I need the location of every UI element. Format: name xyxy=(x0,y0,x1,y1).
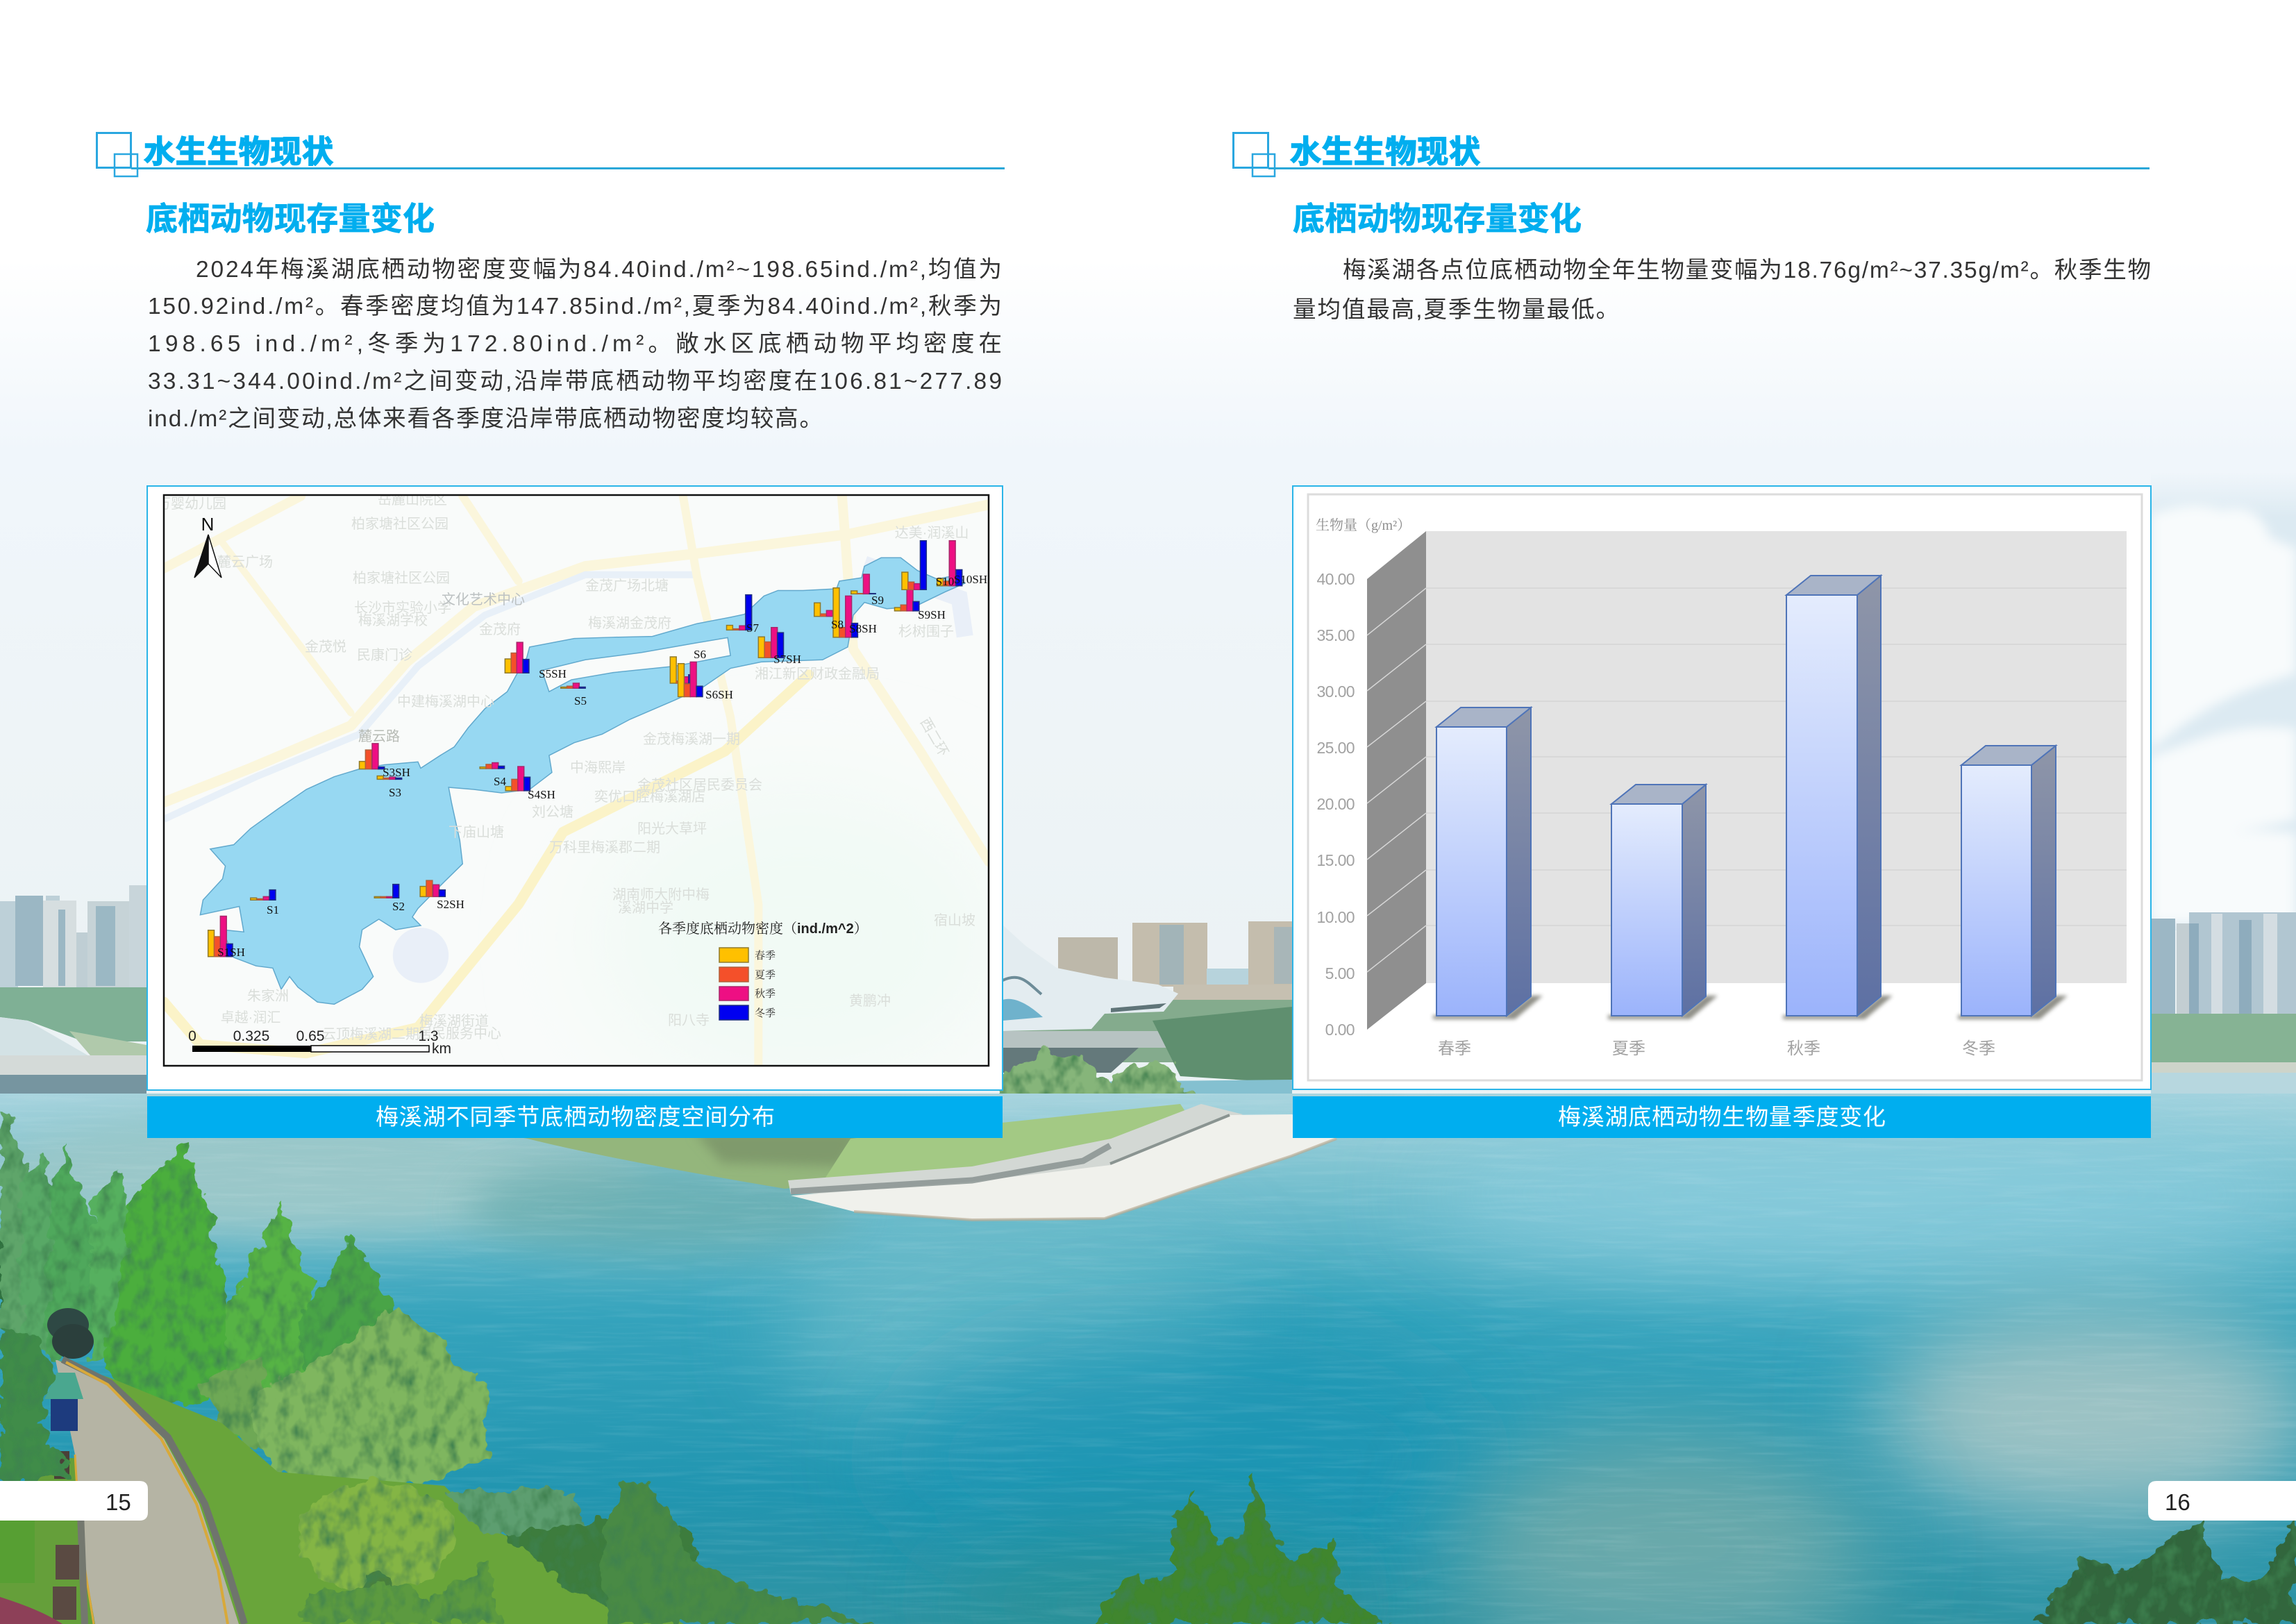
text block: density description xyxy=(148,257,1002,432)
text block: biomass description: 量均值最高,夏季生物量最低。 xyxy=(1293,297,1619,323)
right page header xyxy=(1233,133,2150,176)
map legend: 秋季 xyxy=(755,986,776,1001)
faint basemap labels: 麓云路 xyxy=(358,728,400,744)
faint basemap labels: 中建梅溪湖中心 xyxy=(397,694,494,710)
background: grass and footpath xyxy=(0,1359,684,1624)
text block: density description: 150.92ind./m²。春季密度均值为147.85ind./m²,夏季为84.40ind./m²,秋季为 xyxy=(148,294,1002,319)
page number 16: 16 xyxy=(2165,1489,2190,1515)
text block: density description: 2024年梅溪湖底栖动物密度变幅为84.40ind./m²~198.65ind./m²,均值为 xyxy=(196,257,1002,283)
bar: autumn xyxy=(1783,576,1893,1019)
category labels: 春季 xyxy=(1438,1039,1471,1058)
y axis labels: 30.00 xyxy=(1316,683,1355,701)
background: central buildings and park xyxy=(1003,921,1293,1118)
faint basemap labels: 梅溪湖金茂府 xyxy=(588,615,671,631)
faint basemap labels: 居民服务中心 xyxy=(418,1026,501,1041)
station bar charts xyxy=(208,541,962,957)
faint basemap labels: 杉树围子 xyxy=(898,623,954,639)
page number 15 xyxy=(0,1481,148,1521)
station labels: S5 xyxy=(574,694,587,708)
header rule xyxy=(1268,167,2150,169)
station labels: S4SH xyxy=(528,788,555,801)
lake xyxy=(200,558,965,1004)
faint basemap labels: 金茂社区居民委员会 xyxy=(637,777,762,793)
y axis labels: 10.00 xyxy=(1316,908,1355,926)
left page header xyxy=(97,133,1005,176)
map legend: 冬季 xyxy=(755,1005,776,1020)
heading: section title: 水生生物现状 xyxy=(1290,134,1480,169)
map legend xyxy=(658,921,868,1020)
faint basemap labels: 湖南师大附中梅 xyxy=(612,887,710,903)
faint basemap labels: 西二环 xyxy=(917,716,951,759)
subheading left: 底栖动物现存量变化 xyxy=(146,201,435,237)
station labels: S1SH xyxy=(217,946,245,959)
map base with roads xyxy=(157,492,1007,1090)
background: lakeside trees xyxy=(0,1111,487,1488)
station labels: S7 xyxy=(746,621,759,635)
scale bar xyxy=(188,1028,451,1057)
text block: density description: 33.31~344.00ind./m²之间变动,沿岸带底栖动物平均密度在106.81~277.89 xyxy=(148,369,1002,394)
station labels: S5SH xyxy=(539,667,567,680)
station labels: S6SH xyxy=(705,688,733,701)
faint basemap labels: 万婴幼儿园 xyxy=(157,496,226,512)
faint basemap labels: 柏家塘社区公园 xyxy=(351,516,449,532)
faint basemap labels: 金茂梅溪湖一期 xyxy=(643,731,740,747)
bar: winter xyxy=(1958,746,2068,1019)
background: lake water xyxy=(0,1094,2296,1624)
y axis labels xyxy=(1316,570,1355,1039)
heading: section title: 水生生物现状 xyxy=(144,134,333,169)
faint basemap labels: 中海熙岸 xyxy=(570,760,626,776)
station labels: S3 xyxy=(389,786,401,799)
faint basemap labels: 下庙山塘 xyxy=(449,824,504,840)
map legend: 夏季 xyxy=(755,967,776,982)
faint basemap labels: 朱家洲 xyxy=(247,988,289,1004)
scale bar: 0.325 xyxy=(233,1028,269,1044)
faint basemap labels: 长沙市实验小学 xyxy=(354,600,451,616)
panel: biomass chart xyxy=(1293,486,2151,1089)
panel: density map xyxy=(147,486,1007,1090)
y axis labels: 0.00 xyxy=(1325,1021,1355,1039)
faint basemap labels: 黄鹏冲 xyxy=(849,993,891,1009)
lake island xyxy=(542,637,730,692)
faint basemap labels: 金茂府 xyxy=(479,621,521,637)
station labels: S9SH xyxy=(918,608,946,621)
scale bar: km xyxy=(432,1041,451,1057)
text block: biomass description: 梅溪湖各点位底栖动物全年生物量变幅为18.76g/m²~37.35g/m²。秋季生物 xyxy=(1343,258,2151,283)
bar: summer xyxy=(1608,785,1718,1019)
faint basemap labels: 奕优口腔梅溪湖店 xyxy=(594,789,705,805)
bar: spring xyxy=(1433,708,1543,1019)
faint basemap labels: 文化艺术中心 xyxy=(442,592,525,608)
station labels: S8SH xyxy=(849,622,877,635)
station labels: S2 xyxy=(392,900,405,913)
icon: north arrow: N xyxy=(201,514,214,535)
faint basemap labels: 金茂悦 xyxy=(305,639,346,655)
station labels xyxy=(217,573,987,959)
header rule xyxy=(131,167,1005,169)
scale bar: 0.65 xyxy=(296,1028,324,1044)
y axis labels: 40.00 xyxy=(1316,570,1355,588)
back wall and gridlines xyxy=(1426,531,2127,983)
faint basemap labels: 卓越·润汇 xyxy=(221,1010,280,1026)
station labels: S4 xyxy=(494,775,506,788)
faint basemap labels: 柏家塘社区公园 xyxy=(353,570,450,586)
faint basemap labels: 达美·润溪山 xyxy=(895,525,969,541)
faint basemap labels: 湘江新区财政金融局 xyxy=(755,666,880,682)
faint basemap labels xyxy=(157,492,975,1042)
y axis labels: 25.00 xyxy=(1316,739,1355,757)
y axis labels: 20.00 xyxy=(1316,795,1355,813)
page number 15: 15 xyxy=(106,1489,131,1515)
y axis labels: 35.00 xyxy=(1316,626,1355,644)
faint basemap labels: 宿山坡 xyxy=(934,912,975,928)
faint basemap labels: 刘公塘 xyxy=(532,804,573,820)
y axis labels: 5.00 xyxy=(1325,964,1355,982)
text block: density description: ind./m²之间变动,总体来看各季度沿岸带底栖动物密度均较高。 xyxy=(148,406,823,432)
station labels: S8 xyxy=(831,618,844,631)
subheading right: 底栖动物现存量变化 xyxy=(1293,201,1582,237)
faint basemap labels: 麓云广场 xyxy=(217,554,273,570)
faint basemap labels: 梅溪湖学校 xyxy=(358,612,428,628)
icon: north arrow xyxy=(194,514,221,578)
faint basemap labels: 阳八寺 xyxy=(668,1012,710,1028)
faint basemap labels: 岳麓山院区 xyxy=(378,492,447,508)
icon: overlapping squares xyxy=(1233,133,1275,176)
map legend: 各季度底栖动物密度（ind./m^2） xyxy=(658,921,868,937)
station labels: S1 xyxy=(267,903,279,916)
faint basemap labels: 阳光大草坪 xyxy=(637,821,707,837)
station labels: S2SH xyxy=(437,898,464,911)
background: right skyline xyxy=(2151,912,2296,1100)
scale bar: 1.3 xyxy=(418,1028,439,1044)
scale bar: 0 xyxy=(188,1028,196,1044)
background: shore and beach xyxy=(486,1104,1336,1220)
caption: density map: 梅溪湖不同季节底栖动物密度空间分布 xyxy=(376,1104,775,1130)
faint basemap labels: 民康门诊 xyxy=(357,647,412,663)
station labels: S6 xyxy=(694,648,706,661)
page number 16 xyxy=(2148,1481,2296,1521)
icon: overlapping squares xyxy=(97,133,137,176)
caption: density map xyxy=(147,1096,1003,1138)
background: left skyline xyxy=(0,885,146,1139)
station labels: S10 xyxy=(936,575,954,588)
faint basemap labels: 金茂广场北塘 xyxy=(585,578,669,594)
faint basemap labels: 梅溪湖街道 xyxy=(419,1013,489,1029)
background: foreground trees xyxy=(0,1330,2296,1624)
station labels: S9 xyxy=(871,594,884,607)
text block: biomass description xyxy=(1293,258,2151,323)
map frame xyxy=(164,495,989,1066)
station labels: S7SH xyxy=(773,653,801,666)
station labels: S10SH xyxy=(954,573,987,586)
category labels: 冬季 xyxy=(1962,1039,1995,1058)
caption: biomass chart xyxy=(1293,1096,2151,1138)
faint basemap labels: 溪湖中学 xyxy=(618,900,673,916)
category labels: 秋季 xyxy=(1787,1039,1820,1058)
map legend: 春季 xyxy=(755,948,776,962)
faint basemap labels: 云顶梅溪湖二期 xyxy=(322,1026,419,1042)
y axis labels: 15.00 xyxy=(1316,851,1355,869)
caption: biomass chart: 梅溪湖底栖动物生物量季度变化 xyxy=(1558,1104,1886,1130)
faint basemap labels: 万科里梅溪郡二期 xyxy=(549,839,660,855)
category labels: 夏季 xyxy=(1612,1039,1645,1058)
text block: density description: 198.65 ind./m²,冬季为172.80ind./m²。敞水区底栖动物平均密度在 xyxy=(148,331,1002,357)
station labels: S3SH xyxy=(383,766,410,779)
category labels xyxy=(1438,1039,1995,1058)
axis title: 生物量（g/m²） xyxy=(1316,517,1411,533)
left wall xyxy=(1367,531,1426,1030)
